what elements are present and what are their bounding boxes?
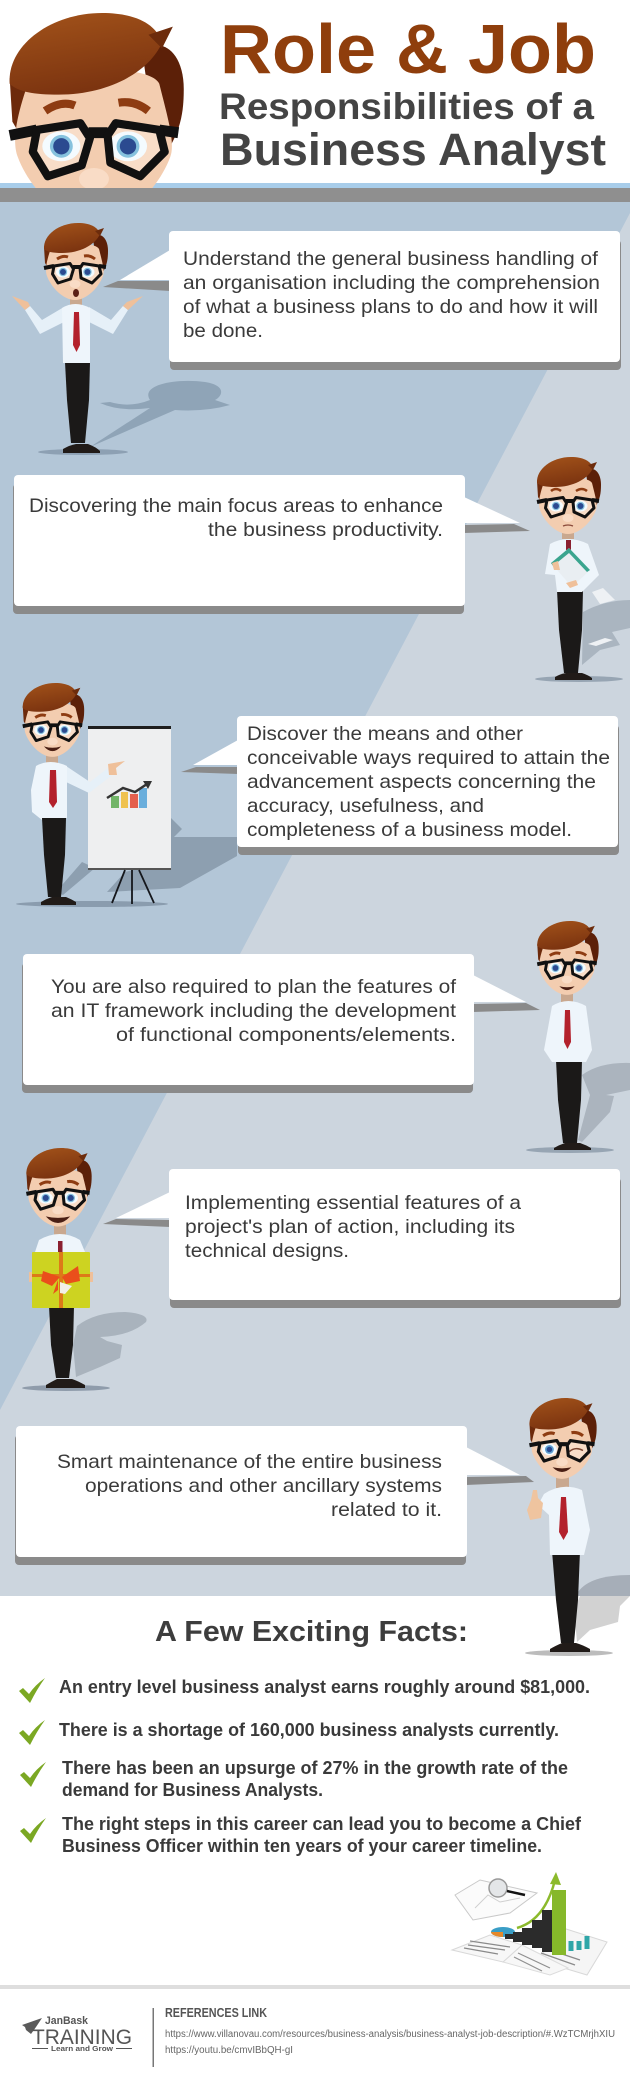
text <box>29 495 443 541</box>
hand <box>108 761 125 775</box>
strapline rules <box>32 2048 132 2050</box>
text: related to it. <box>331 1499 442 1521</box>
footer <box>22 2005 615 2067</box>
divider band <box>0 1985 630 1989</box>
card shadow <box>170 240 621 370</box>
callout 4 <box>22 954 540 1093</box>
trousers <box>556 1060 582 1143</box>
shoes <box>63 444 100 453</box>
fact text <box>62 1814 582 1856</box>
gift box <box>32 1252 90 1308</box>
icon: large character head <box>8 13 184 188</box>
head with worried brows <box>537 457 601 534</box>
hand <box>552 561 578 588</box>
magnifier <box>489 1879 525 1897</box>
tail <box>464 497 520 523</box>
fact text: demand for Business Analysts. <box>62 1780 323 1800</box>
figure 3: analyst presenting at a flip chart <box>16 683 237 907</box>
text: accuracy, usefulness, and <box>247 795 484 817</box>
strapline: Learn and Grow <box>51 2044 113 2053</box>
shirt <box>35 1234 85 1252</box>
tail shadow <box>473 1003 540 1012</box>
callout 6 <box>15 1426 534 1565</box>
head <box>537 921 599 995</box>
card shadow <box>170 1178 621 1308</box>
figure 6: analyst winking with thumbs up <box>525 1398 630 1656</box>
text: Implementing essential features of a <box>185 1192 521 1214</box>
neck <box>556 1476 569 1488</box>
neck <box>54 1224 66 1236</box>
figure 2: analyst with clipboard <box>535 457 630 682</box>
cast shadow <box>56 818 237 895</box>
right paper <box>537 1928 607 1975</box>
text: Discovering the main focus areas to enhance <box>29 495 443 517</box>
fact 2 <box>19 1720 559 1745</box>
text: an IT framework including the development <box>51 1000 457 1022</box>
trousers <box>42 818 66 897</box>
cast shadow on white <box>574 1596 630 1642</box>
tail shadow <box>464 524 530 533</box>
shirt <box>31 762 67 820</box>
cast shadow <box>582 600 630 665</box>
tail shadow <box>103 1219 170 1227</box>
tail <box>120 250 170 280</box>
card <box>16 1426 467 1557</box>
reference url 2: https://youtu.be/cmvIBbQH-gI <box>165 2045 293 2056</box>
shoes <box>554 1143 591 1150</box>
shirt <box>544 1001 592 1062</box>
growth arrow <box>517 1880 555 1928</box>
shoes <box>550 1643 590 1652</box>
icon: check mark <box>19 1678 45 1703</box>
text: Smart maintenance of the entire business <box>57 1451 442 1473</box>
fact 3 <box>20 1758 568 1800</box>
flying papers <box>588 588 615 646</box>
text: Understand the general business handling of <box>183 248 599 270</box>
card shadow <box>13 484 464 614</box>
fact text: Business Officer within ten years of your career timeline. <box>62 1836 542 1856</box>
shirt <box>545 539 599 592</box>
text: be done. <box>183 320 263 342</box>
neck <box>561 990 573 1002</box>
arms <box>25 306 128 334</box>
footer divider <box>152 2008 154 2067</box>
shoes <box>41 897 76 905</box>
card shadow <box>15 1435 466 1565</box>
tail <box>193 740 238 765</box>
neck <box>46 752 58 763</box>
shirt <box>62 304 90 363</box>
illustration: reports with growth chart <box>452 1872 607 1975</box>
figure 4: analyst with hands in pockets <box>526 921 630 1153</box>
callout 2 <box>13 475 530 614</box>
head <box>44 223 108 300</box>
green bar <box>552 1890 566 1955</box>
text: advancement aspects concerning the <box>247 771 596 793</box>
shirt <box>538 1487 590 1555</box>
fact 4 <box>20 1814 582 1856</box>
tail shadow <box>103 281 170 291</box>
head winking <box>529 1398 597 1479</box>
panel: facts <box>0 1596 630 1985</box>
heading: a few exciting facts: A Few Exciting Facts: <box>155 1616 468 1648</box>
tie <box>49 770 57 808</box>
text: Discover the means and other <box>247 723 524 745</box>
callout 1 <box>103 231 621 370</box>
gift tag <box>60 1282 72 1294</box>
tail shadow <box>181 767 238 774</box>
subtitle line 2: Business Analyst <box>220 124 606 175</box>
cast shadow on background <box>578 1575 630 1596</box>
tail <box>116 1192 170 1218</box>
hands <box>29 1272 93 1282</box>
text: You are also required to plan the features of <box>51 976 457 998</box>
ribbon <box>32 1252 90 1308</box>
flip chart <box>88 726 171 904</box>
wordmark main: TRAINING <box>32 2026 132 2049</box>
text: project's plan of action, including its <box>185 1216 515 1238</box>
text: technical designs. <box>185 1240 349 1262</box>
head <box>23 683 84 757</box>
fact text: There has been an upsurge of 27% in the growth rate of the <box>62 1758 568 1778</box>
card <box>169 1169 620 1300</box>
ground shadow <box>38 449 128 455</box>
bow <box>41 1266 80 1294</box>
light blue strip <box>0 183 630 188</box>
trousers <box>65 362 90 443</box>
left paper <box>452 1935 522 1962</box>
ground shadow <box>22 1385 110 1391</box>
card <box>237 716 618 847</box>
text: of what a business plans to do and how it will <box>183 296 598 318</box>
reference url 1: https://www.villanovau.com/resources/business-analysis/business-analyst-job-description/#.WzTCMrjhXIU <box>165 2029 615 2040</box>
text: an organisation including the comprehension <box>183 272 600 294</box>
tie <box>566 540 571 550</box>
text: the business productivity. <box>208 519 443 541</box>
card shadow <box>238 725 619 855</box>
tripod <box>112 870 154 904</box>
logo: JanBask Training <box>22 2015 132 2053</box>
pointing arm <box>66 766 111 793</box>
fact text: An entry level business analyst earns roughly around $81,000. <box>59 1677 590 1697</box>
grey band <box>0 188 630 202</box>
mini bar chart <box>107 781 152 808</box>
pie chart <box>491 1927 515 1937</box>
fact 1 <box>19 1677 590 1703</box>
callout 5 <box>103 1169 621 1308</box>
icon: check mark <box>20 1762 46 1787</box>
head <box>26 1148 92 1227</box>
card <box>169 231 620 362</box>
teal mini bars <box>563 1936 587 1951</box>
tie <box>58 1241 62 1253</box>
ground shadow <box>535 676 623 682</box>
trousers <box>49 1306 74 1378</box>
text <box>247 723 610 841</box>
card <box>14 475 465 606</box>
subtitle line 1: Responsibilities of a <box>219 86 594 127</box>
text: completeness of a business model. <box>247 819 572 841</box>
text <box>183 248 600 342</box>
hands <box>12 296 143 310</box>
text <box>51 976 457 1046</box>
text: operations and other ancillary systems <box>85 1475 442 1497</box>
ground shadow <box>526 1147 614 1153</box>
tie <box>559 1497 568 1540</box>
neck <box>562 526 574 539</box>
icon: graduation cap <box>22 2018 42 2034</box>
title: Role & Job <box>220 10 596 88</box>
text <box>57 1451 442 1521</box>
trousers <box>552 1551 580 1643</box>
wordmark top: JanBask <box>45 2015 89 2027</box>
cast shadow <box>90 381 230 447</box>
ground shadow <box>525 1650 613 1656</box>
fact text: There is a shortage of 160,000 business analysts currently. <box>59 1720 559 1740</box>
centre paper <box>503 1945 568 1975</box>
ground shadow <box>16 901 168 907</box>
tail <box>473 975 526 1002</box>
card shadow <box>22 963 473 1093</box>
references heading: REFERENCES LINK <box>165 2005 268 2020</box>
tail shadow <box>466 1476 534 1485</box>
tie <box>73 312 80 352</box>
figure 1: shrugging analyst <box>12 223 230 455</box>
tie <box>564 1010 571 1049</box>
callout 3 <box>181 716 619 855</box>
text: conceivable ways required to attain the <box>247 747 610 769</box>
text: of functional components/elements. <box>116 1024 456 1046</box>
card <box>23 954 474 1085</box>
icon: check mark <box>20 1818 46 1843</box>
cast shadow <box>73 1312 147 1377</box>
clipboard <box>551 548 590 587</box>
fact text: The right steps in this career can lead you to become a Chief <box>62 1814 582 1834</box>
text <box>185 1192 521 1262</box>
figure 5: analyst holding a gift <box>22 1148 147 1391</box>
shoes <box>46 1379 85 1388</box>
shoes <box>555 673 592 680</box>
faint sketch paper <box>455 1880 537 1920</box>
panel: responsibilities background <box>0 202 630 1596</box>
trousers <box>557 590 583 673</box>
neck <box>70 292 82 307</box>
fact text <box>62 1758 568 1800</box>
thumbs-up hand <box>527 1490 543 1520</box>
icon: check mark <box>19 1720 45 1745</box>
cast shadow <box>578 1063 630 1142</box>
dark bars <box>505 1910 552 1952</box>
tail <box>466 1447 520 1475</box>
header <box>0 13 630 202</box>
